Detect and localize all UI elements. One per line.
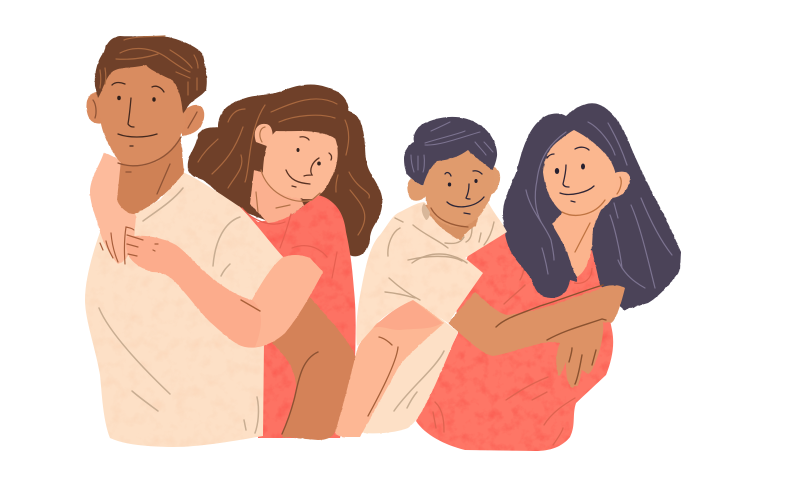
girl face — [263, 131, 338, 199]
person: woman with long dark hair — [416, 103, 681, 451]
girl neck — [250, 170, 304, 223]
boy arm shaded upper part — [373, 300, 442, 330]
woman neckline — [574, 268, 592, 283]
woman hair strands — [526, 122, 672, 288]
man lower shirt (boy's trousers area) — [362, 310, 458, 433]
boy collar shadow — [422, 203, 430, 220]
forearm and hand — [126, 236, 323, 348]
man shirt — [85, 172, 284, 447]
girl thigh — [272, 297, 357, 440]
woman hair — [503, 103, 681, 310]
boy neck — [425, 205, 480, 240]
man neck — [117, 130, 184, 214]
girl arm across man's back — [100, 227, 323, 348]
man face — [98, 55, 186, 166]
boy arm around woman with hand — [448, 285, 625, 388]
woman's arm and hand — [448, 285, 625, 388]
boy shirt fold lines — [385, 218, 494, 300]
girl arm around man's neck — [90, 152, 136, 264]
woman top fold lines — [433, 245, 575, 445]
girl sleeve lines — [242, 208, 337, 278]
girl red shirt — [236, 195, 356, 438]
boy jaw line — [431, 208, 468, 227]
woman neck — [552, 194, 608, 277]
elbow crease — [241, 300, 260, 311]
girl hair strands — [198, 99, 369, 235]
person: girl with wavy hair — [188, 84, 382, 438]
man hair — [95, 36, 207, 114]
person: man in cream shirt — [85, 36, 284, 447]
girl jaw and neck lines — [256, 127, 320, 212]
boy hair strands — [411, 122, 493, 172]
girl ear — [255, 124, 273, 148]
man left ear — [86, 92, 104, 124]
woman face — [543, 130, 616, 216]
person: boy in cream shirt — [335, 117, 507, 437]
woman jaw and neck lines — [562, 177, 621, 252]
man's forearm holding girl leg — [272, 297, 357, 440]
man right ear — [182, 105, 204, 136]
lower shirt fold lines — [394, 351, 444, 411]
man hair strands — [100, 36, 198, 95]
man jaw and neck lines — [93, 100, 197, 194]
man facial features — [112, 83, 164, 146]
boy hair — [404, 117, 497, 186]
woman red top — [416, 232, 613, 451]
boy arm — [335, 298, 444, 437]
girl hair — [188, 84, 382, 256]
lighter sleeve-side upper arm — [252, 255, 323, 347]
arm crease lines — [496, 285, 606, 384]
boy arm creases — [368, 337, 398, 416]
boy face — [423, 147, 494, 227]
girl thigh crease — [282, 352, 318, 434]
woman facial features — [547, 147, 594, 202]
boy shirt — [356, 202, 507, 346]
boy facial features — [445, 171, 484, 214]
boy right ear — [488, 167, 500, 195]
man shirt fold lines — [99, 188, 258, 433]
man's fingers on hand — [100, 227, 158, 264]
girl facial features — [286, 137, 332, 187]
woman ear — [610, 172, 630, 198]
boy left ear — [407, 178, 427, 201]
